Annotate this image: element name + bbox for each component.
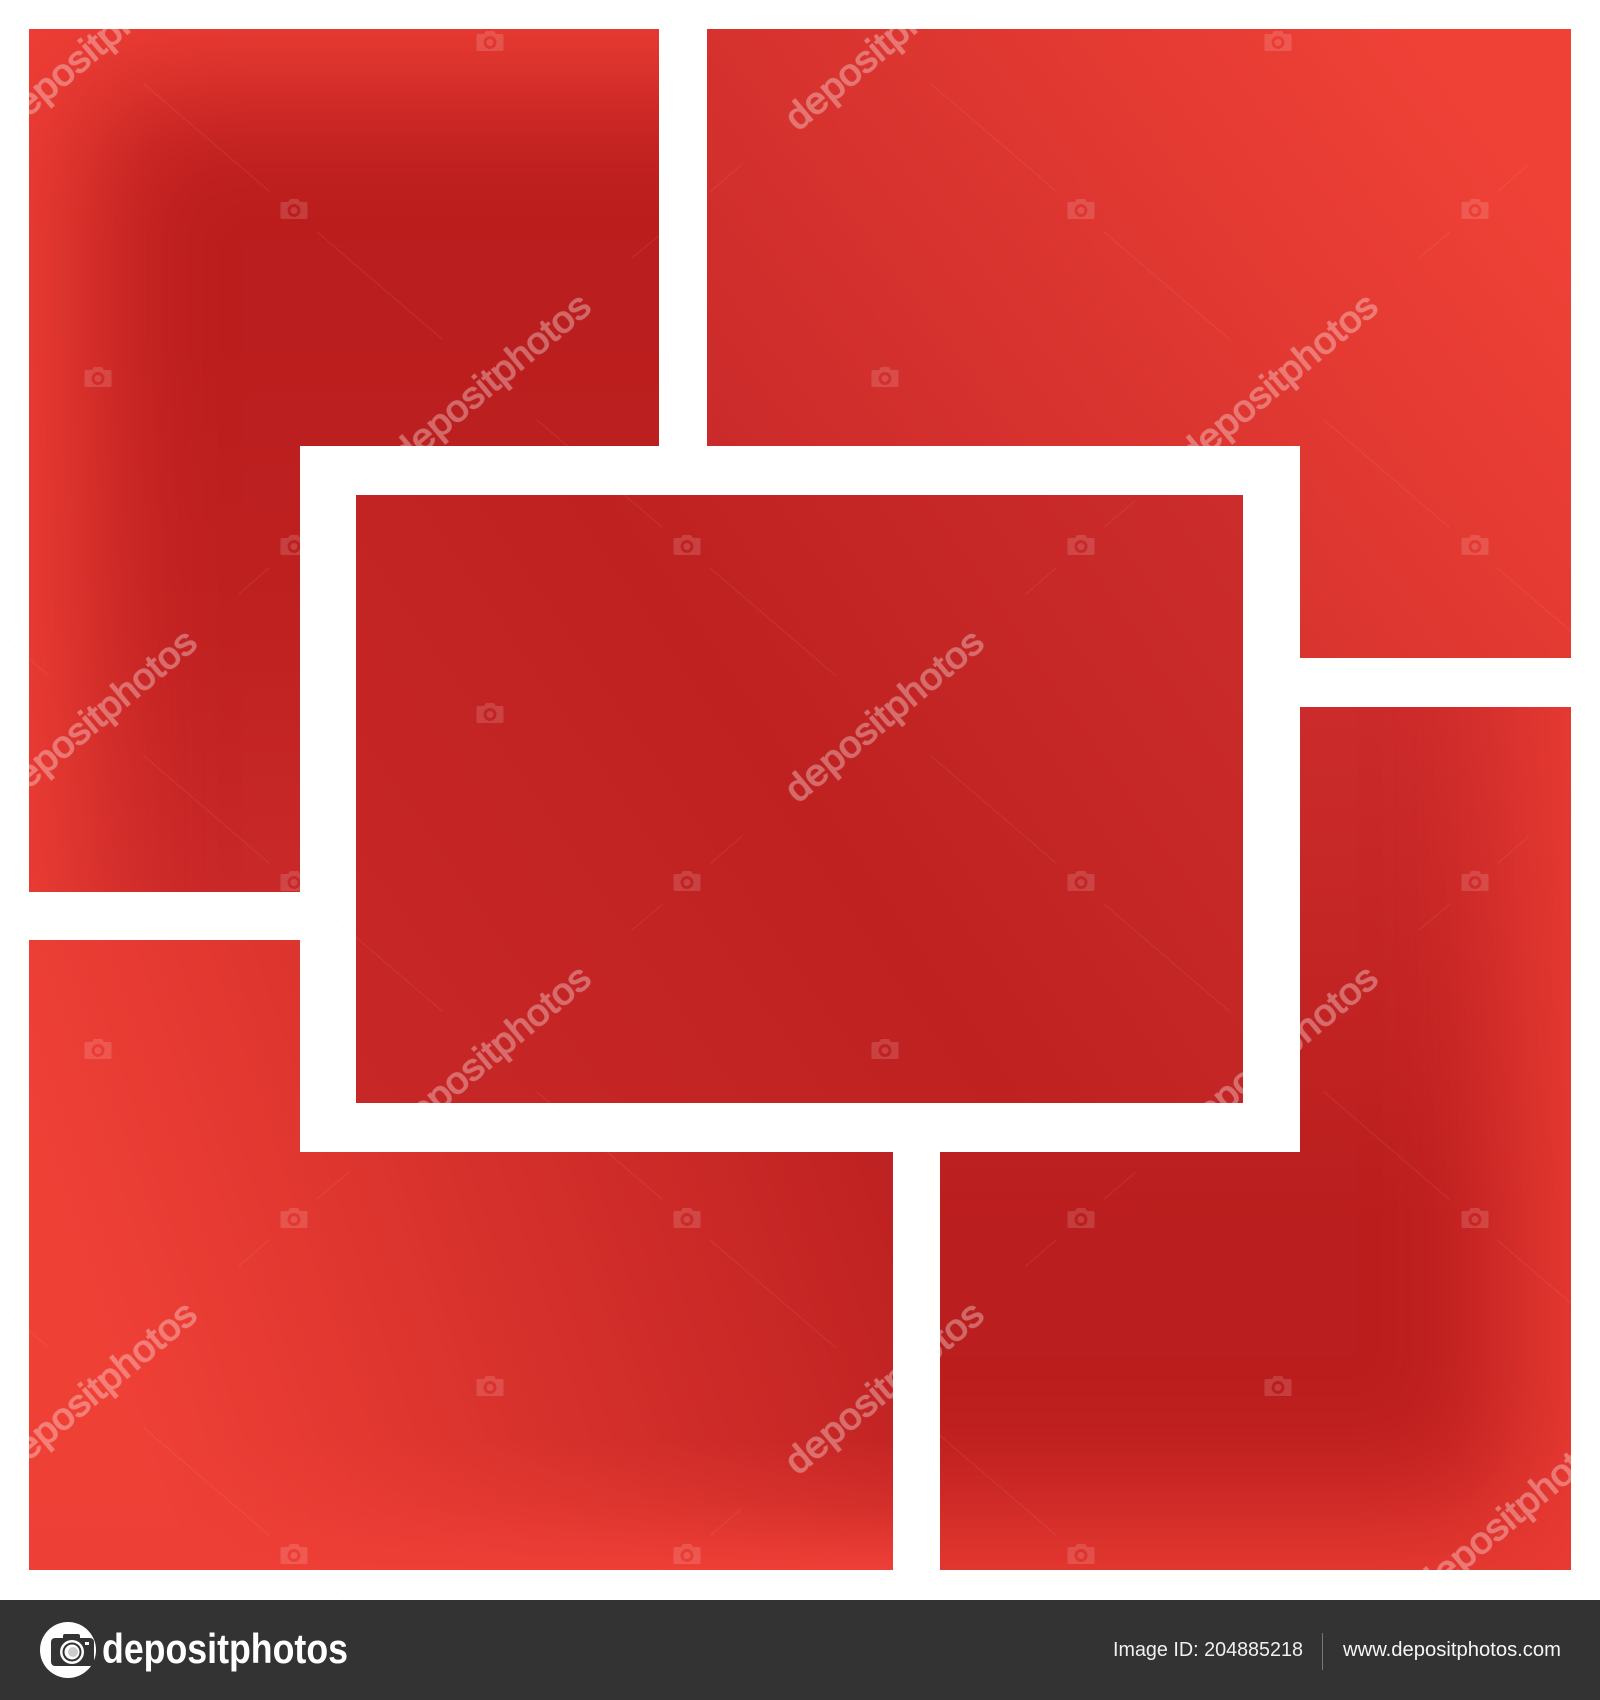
panel: bottom-right red block (940, 707, 1571, 1570)
watermark: depositphotos text repeated diagonally: depositphotos (1171, 957, 1385, 1146)
website url: www.depositphotos.com (1342, 1639, 1561, 1661)
watermark: depositphotos text repeated diagonally: depositphotos (1171, 285, 1385, 474)
watermark: depositphotos text repeated diagonally: depositphotos (777, 621, 991, 810)
watermark: depositphotos text repeated diagonally: depositphotos (384, 957, 598, 1146)
watermark: camera icons (84, 31, 1488, 1564)
footer bar (0, 1600, 1600, 1700)
panel: top-left red block (29, 29, 659, 892)
watermark: depositphotos text repeated diagonally: depositphotos (384, 285, 598, 474)
panel: bottom-left red block (29, 940, 893, 1570)
image id: Image ID: 204885218 (1113, 1639, 1303, 1661)
icon: depositphotos camera logo (40, 1622, 96, 1678)
watermark: depositphotos text repeated diagonally: depositphotos (777, 1293, 991, 1482)
panel: center red rectangle (356, 495, 1243, 1103)
logo wordmark: depositphotos (102, 1625, 348, 1672)
panel: top-right red block (707, 29, 1571, 658)
